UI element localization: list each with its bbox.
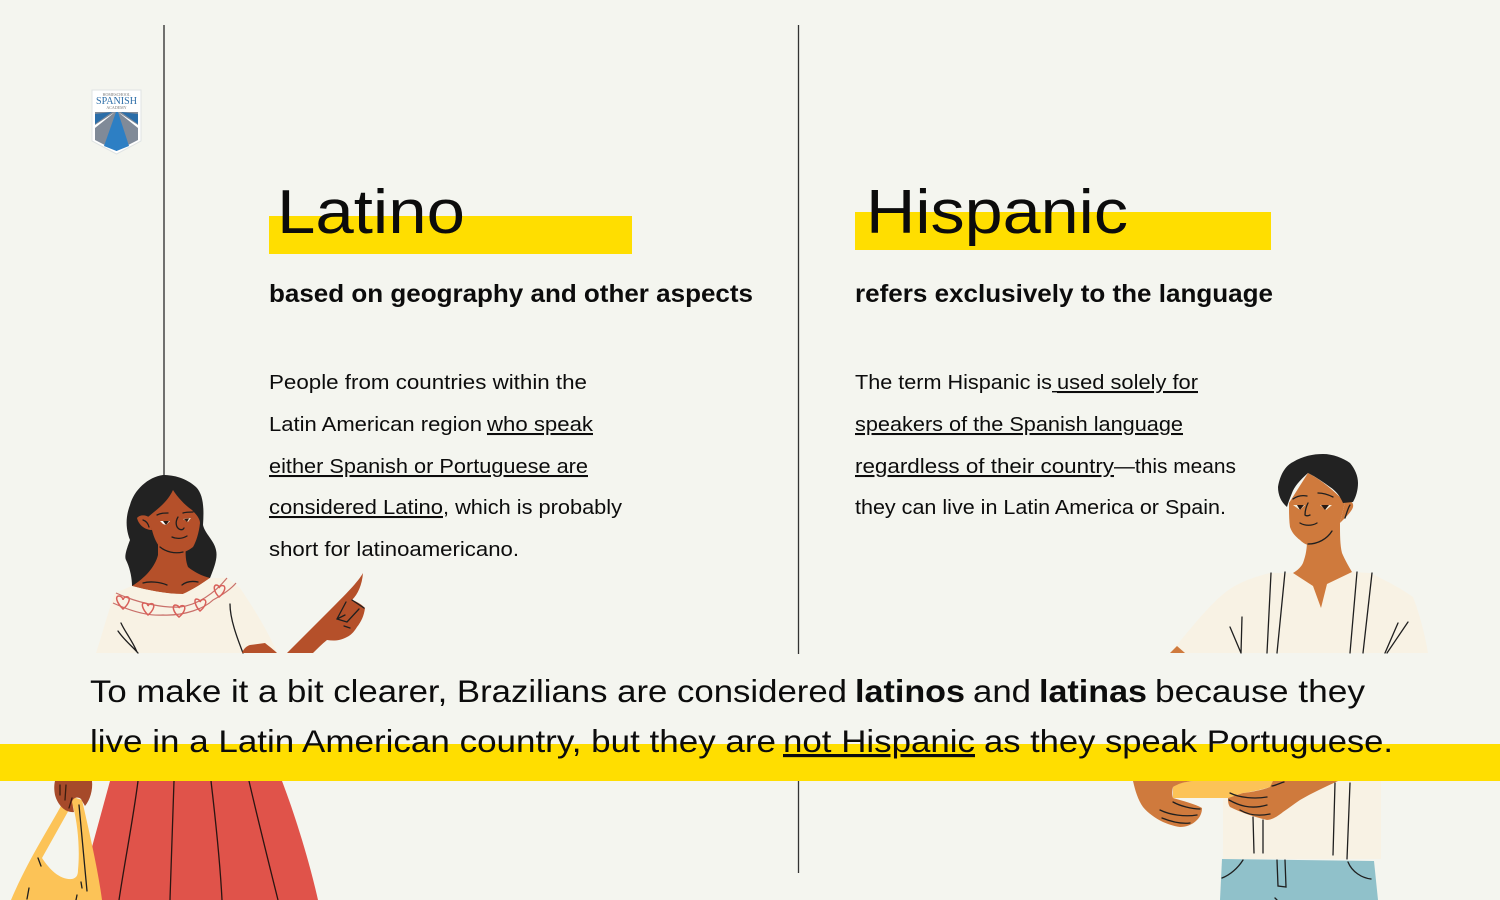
facial details (143, 512, 193, 553)
right arm and hand (1228, 781, 1338, 820)
face (148, 490, 200, 553)
bag (11, 797, 102, 900)
text block: Hispanic description: they can live in Latin America or Spain. (855, 496, 1226, 519)
text block: Hispanic description: regardless of their country (855, 455, 1115, 478)
illustration: man, upper body (1170, 454, 1428, 653)
neck (1293, 523, 1352, 608)
book (1173, 781, 1276, 798)
subheading: Latino: based on geography and other aspects (269, 280, 753, 308)
text block: Latino description: Latin American region (269, 413, 482, 436)
illustration: woman pointing, upper body (96, 475, 365, 653)
hand holding bag (54, 781, 92, 812)
callout: Brazilians sentence: live in a Latin American country, but they are (90, 723, 776, 759)
callout: Brazilians sentence: as they speak Portuguese. (984, 723, 1393, 759)
shirt lower (1223, 781, 1381, 859)
icon: school shield logo: ACADEMY (106, 105, 127, 110)
ear (137, 515, 152, 530)
jeans (1220, 859, 1378, 900)
heading: Hispanic: Hispanic (866, 178, 1128, 247)
skirt (90, 781, 318, 900)
subheading: Hispanic: refers exclusively to the language (855, 280, 1273, 308)
shirt lines (1230, 572, 1408, 653)
icon: school shield logo: SPANISH (96, 96, 137, 107)
facial details (1293, 493, 1350, 544)
shirt (1170, 572, 1428, 653)
text block: Hispanic description: speakers of the Spanish language (855, 413, 1183, 436)
callout: Brazilians sentence: because they (1155, 673, 1365, 709)
text block: Latino description: either Spanish or Portuguese are (269, 455, 588, 478)
heading: Hispanic (855, 178, 1271, 250)
text block: Latino description: who speak (486, 413, 594, 436)
text block: Latino description: People from countries within the (269, 371, 587, 394)
neck and chest (132, 540, 210, 594)
heading: Latino: Latino (277, 178, 465, 247)
text block: Latino description: short for latinoamericano. (269, 538, 519, 561)
face (1289, 473, 1345, 545)
heading: Latino (269, 178, 632, 254)
panel: Latino (269, 178, 753, 561)
callout: Brazilians sentence: To make it a bit clearer, Brazilians are considered (90, 673, 847, 709)
text block: Hispanic description: The term Hispanic is (855, 371, 1052, 394)
pointing hand (287, 573, 365, 653)
arm (242, 643, 277, 653)
icon: school shield logo (92, 90, 141, 154)
panel: Hispanic (855, 178, 1273, 519)
text block: Latino description: considered Latino (269, 496, 443, 519)
callout: Brazilians sentence: latinas (1039, 673, 1147, 709)
text block: Hispanic description: used solely for (1057, 371, 1198, 394)
blouse embroidery (113, 578, 236, 615)
illustration: man lower body (1133, 781, 1381, 900)
illustration: woman lower body with bag (11, 781, 318, 900)
callout: Brazilians sentence: not Hispanic (783, 723, 975, 759)
left hand (1133, 781, 1202, 827)
blouse (96, 578, 277, 653)
icon: school shield logo: HOMESCHOOL (103, 92, 131, 97)
callout: Brazilians sentence: latinos (855, 673, 965, 709)
text block: Hispanic description (855, 371, 1236, 519)
hair (1278, 454, 1358, 507)
shirt lines lower (1253, 783, 1350, 859)
text block: Hispanic description: —this means (1114, 455, 1236, 478)
hand tip (1170, 646, 1185, 653)
text block: Latino description: , which is probably (443, 496, 623, 519)
callout: Brazilians sentence: and (973, 673, 1031, 709)
hair (125, 475, 217, 586)
ear (1340, 501, 1353, 523)
callout: Brazilians sentence (0, 654, 1500, 781)
text block: Latino description (269, 371, 623, 561)
